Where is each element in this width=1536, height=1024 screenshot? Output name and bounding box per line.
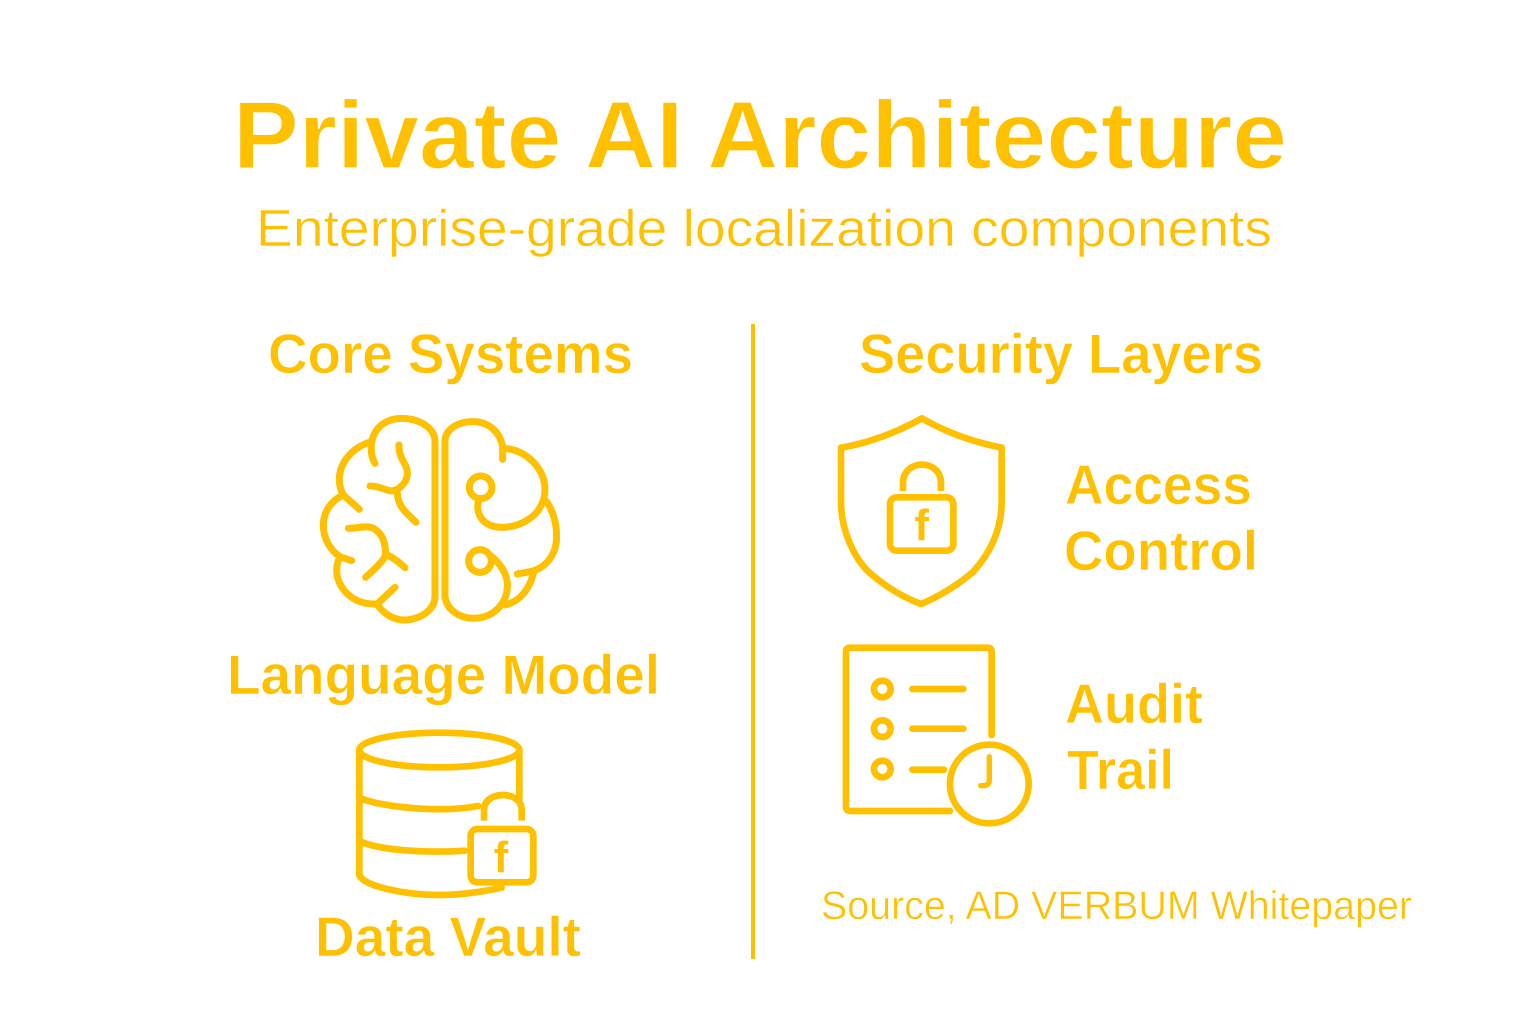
label: data vault: Data Vault [315,905,581,968]
icon: audit document with clock [846,648,1029,823]
label: access control: Control [1064,519,1258,582]
label: access control [1064,453,1258,582]
icon: brain [323,418,557,620]
title: Private AI Architecture [233,82,1287,189]
source note: Source, AD VERBUM Whitepaper [821,884,1412,928]
label: audit trail [1065,672,1203,801]
divider between columns [751,324,755,959]
heading: security layers: Security Layers [859,322,1263,385]
icon: database with lock [359,733,533,895]
icon: shield with lock [841,418,1002,604]
label: language model: Language Model [227,643,660,706]
panel: security layers [821,322,1412,928]
label: audit trail: Audit [1065,672,1203,735]
icon: shield with lock: f [914,502,929,550]
label: audit trail: Trail [1067,738,1174,801]
heading: core systems: Core Systems [268,322,633,385]
icon: database with lock: f [494,834,509,882]
subtitle: Enterprise-grade localization components [256,200,1272,258]
label: access control: Access [1065,453,1252,516]
panel: core systems [227,322,660,968]
